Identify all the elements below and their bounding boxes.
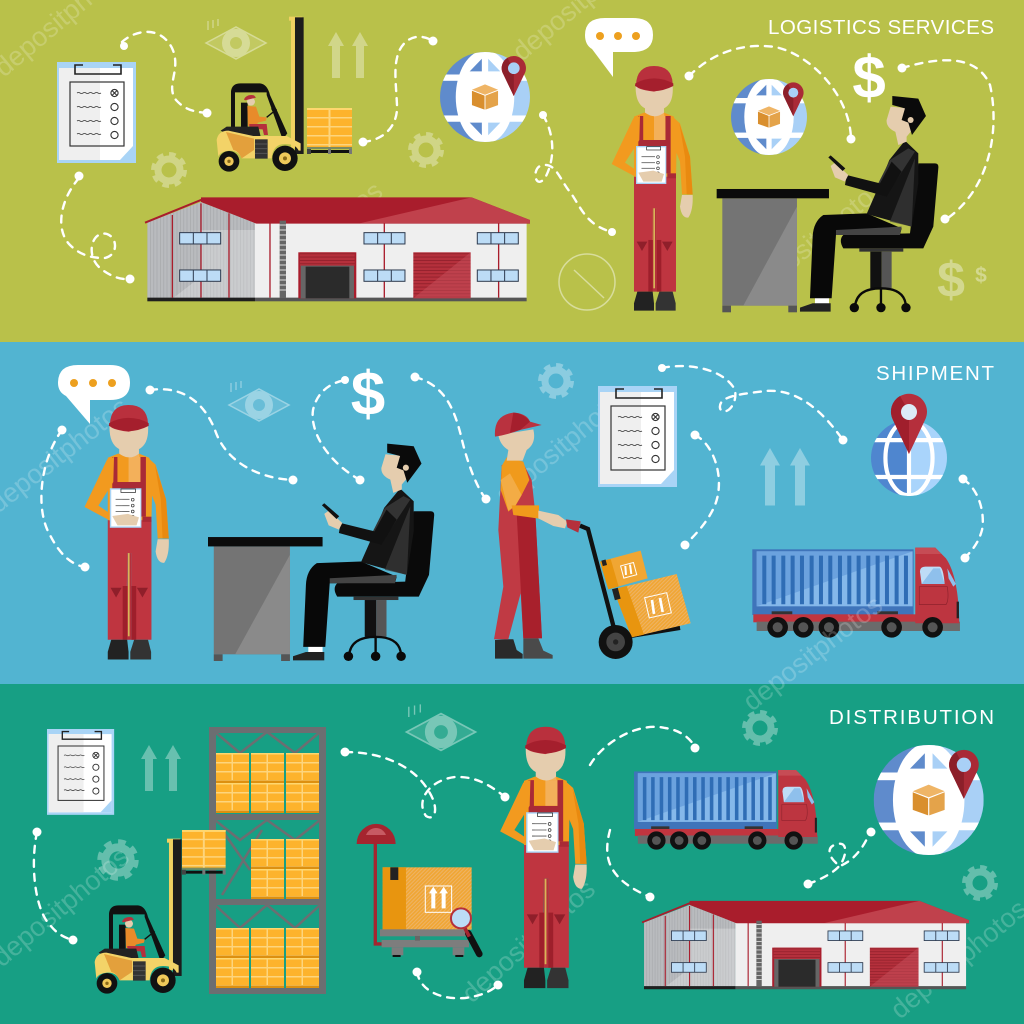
panel: logistics services (0, 0, 1024, 342)
faint dollar signs: $ (937, 252, 965, 308)
dashed connector paths (61, 32, 994, 284)
seated manager (800, 96, 938, 312)
icon: gear (540, 366, 572, 396)
icon: globe with parcel and pin (440, 50, 530, 144)
parcel on weighing scale (357, 824, 479, 957)
icon: clock (559, 254, 615, 310)
watermark (0, 0, 890, 305)
watermark across panels: depositphotos (737, 590, 888, 717)
heading: distribution: DISTRIBUTION (829, 706, 994, 729)
icon: eye (406, 704, 476, 750)
icon: checklist clipboard (47, 729, 114, 815)
panel: shipment (0, 342, 1024, 684)
icon: globe with parcel and pin (731, 77, 807, 157)
icon: up arrows (328, 32, 368, 78)
forklift lifting pallet (95, 830, 226, 994)
worker with clipboard (85, 405, 169, 660)
heading: shipment: SHIPMENT (876, 362, 994, 385)
dashed connector paths (41, 364, 983, 572)
icon: checklist clipboard (57, 62, 136, 163)
speech bubble (58, 365, 130, 424)
worker body (494, 413, 581, 659)
dollar sign: $ (351, 360, 385, 429)
icon: eye (206, 19, 266, 59)
panel: distribution (0, 684, 1024, 1024)
icon: gear (964, 868, 996, 898)
faint dollar signs: $ (975, 264, 987, 287)
faint dollar signs (937, 252, 987, 308)
dollar sign: $ (852, 44, 886, 111)
worker with clipboard (500, 727, 587, 988)
warehouse building (642, 901, 969, 989)
watermark: depositphotos (237, 176, 388, 303)
container truck (752, 548, 960, 638)
icon: globe with big pin (871, 394, 947, 496)
watermark: depositphotos (742, 174, 890, 305)
worker with clipboard (612, 66, 693, 311)
heading: logistics services: LOGISTICS SERVICES (768, 16, 994, 39)
forklift with pallet (217, 17, 352, 172)
icon: gear (744, 712, 776, 744)
boxes (600, 551, 691, 637)
icon: up arrows (760, 448, 810, 506)
watermark (0, 842, 1024, 1024)
storage rack with crates (209, 727, 326, 994)
container truck (634, 770, 818, 850)
icon: globe with parcel and pin (874, 743, 984, 857)
icon: gear (410, 134, 442, 166)
icon: checklist clipboard (598, 386, 677, 487)
icon: gear (154, 154, 184, 186)
icon: up arrows (141, 745, 181, 791)
icon: gear (100, 842, 136, 878)
desk (208, 537, 323, 661)
speech bubble (585, 18, 653, 77)
seated manager (293, 444, 434, 661)
hand truck wheel and frame (580, 526, 680, 638)
watermark: depositphotos (490, 379, 638, 510)
worker pushing hand truck (494, 413, 691, 659)
watermark: depositphotos (456, 874, 601, 1008)
dashed connector paths (32, 727, 876, 998)
icon: eye (229, 381, 289, 421)
warehouse building (145, 197, 530, 301)
watermark (0, 379, 638, 519)
desk (717, 189, 829, 312)
